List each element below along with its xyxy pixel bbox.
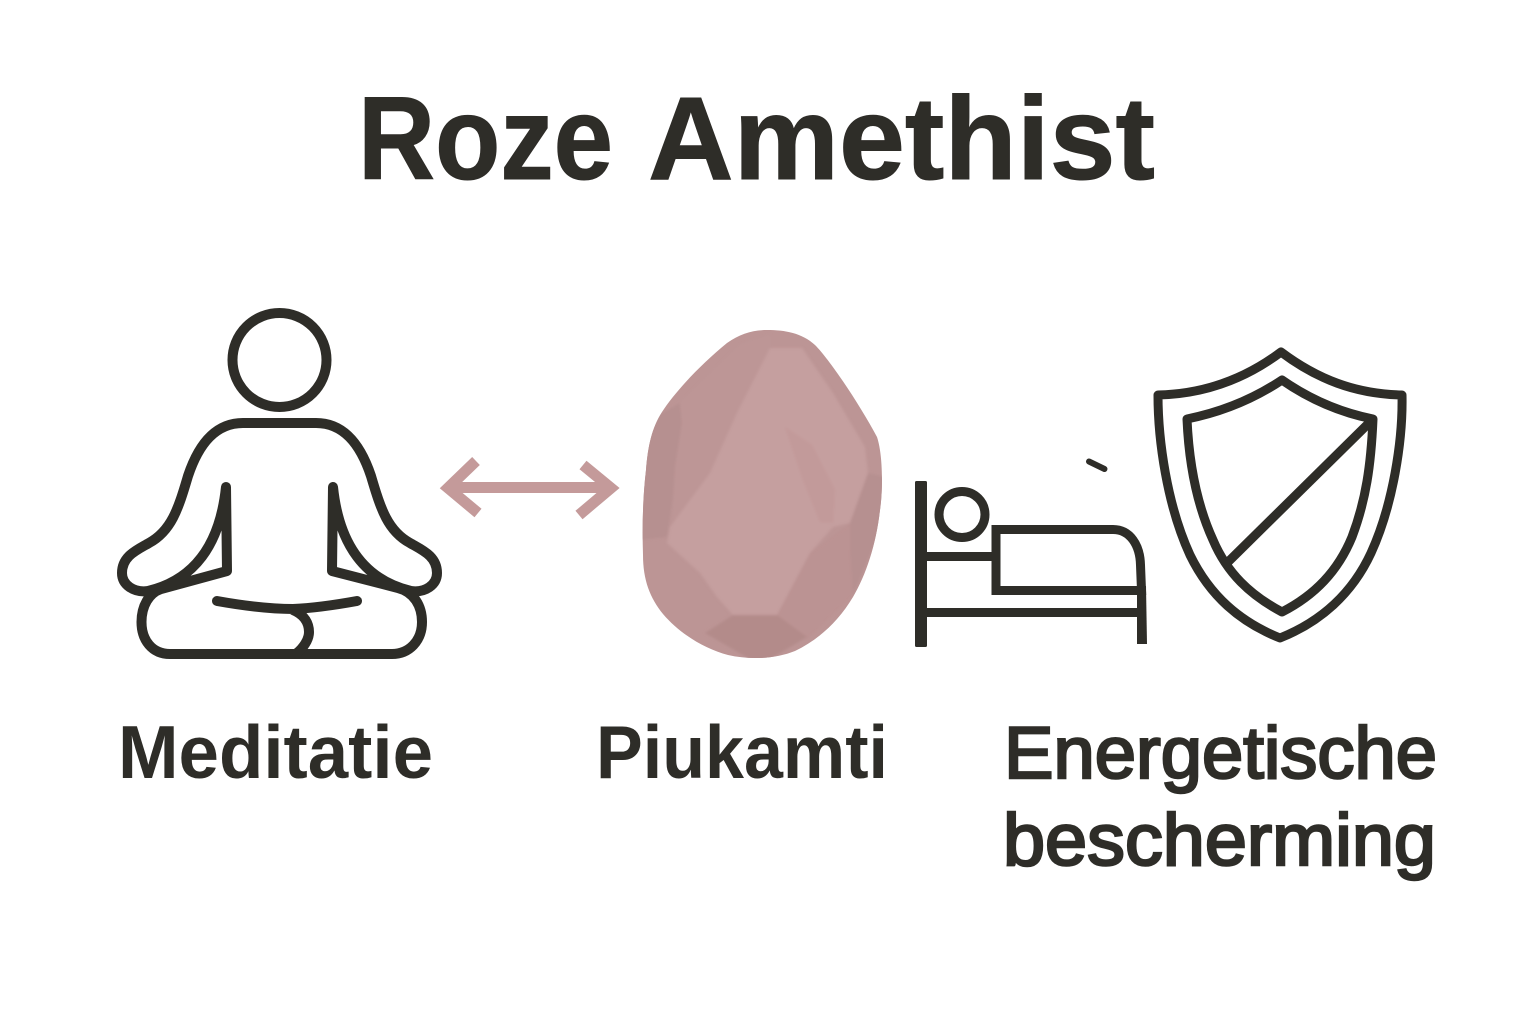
title: Roze [358, 73, 613, 205]
small dash [1089, 462, 1104, 469]
left dark facet [642, 413, 662, 540]
head [232, 313, 326, 407]
label: Energetische bescherming [1003, 713, 1437, 881]
crossed legs [217, 601, 357, 653]
label: Energetische bescherming: bescherming [1003, 800, 1436, 881]
upper left facet [673, 335, 770, 527]
icon: meditating person [122, 313, 437, 654]
head on pillow [939, 492, 985, 538]
main light facet [667, 348, 868, 615]
label: Energetische bescherming: Energetische [1004, 713, 1437, 794]
bed rail [926, 608, 1142, 617]
right dark facet [872, 476, 882, 550]
icon: shield [1158, 352, 1402, 638]
lower right facet [777, 523, 853, 640]
inner shield [1187, 380, 1373, 612]
body and legs outline [122, 423, 437, 654]
foot leg [1137, 586, 1147, 644]
icon: person in bed [915, 462, 1147, 647]
bed post [915, 481, 927, 647]
rose amethyst stone [640, 330, 885, 665]
outer shield [1158, 352, 1402, 638]
inner shaded facet [785, 427, 835, 523]
label: Meditatie: Meditatie [118, 710, 433, 794]
title: Amethist [648, 73, 1155, 205]
blanket [996, 530, 1142, 590]
mattress bar [926, 552, 994, 561]
label: Piukamti: Piukamti [596, 710, 888, 794]
arrow: two-way link [448, 461, 611, 515]
shield diagonal [1228, 421, 1371, 562]
bottom facet [708, 616, 804, 658]
title [358, 73, 1155, 205]
